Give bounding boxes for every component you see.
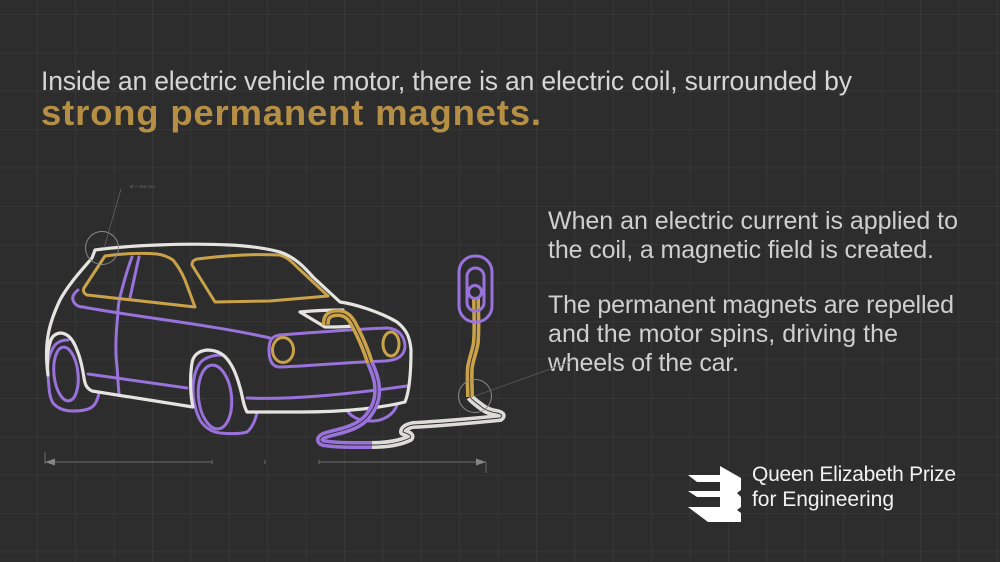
white body outline (46, 244, 411, 412)
left dimension arrow (45, 452, 212, 464)
text block: explanation: wheels of the car. (547, 349, 739, 377)
callout label: Ø × 152 mm (130, 184, 155, 189)
logo: Queen Elizabeth Prize for Engineering (688, 463, 956, 522)
amber windows and lights (83, 253, 399, 362)
cable core line (320, 297, 502, 445)
annotation: cable callout (458, 362, 570, 412)
car illustration (46, 244, 502, 445)
dimension arrows (45, 452, 486, 473)
heading line 1: Inside an electric vehicle motor, there is an electric coil, surrounded by (41, 66, 853, 96)
heading (41, 66, 853, 133)
charging cable (320, 297, 502, 445)
logo mark (688, 466, 741, 522)
text block: explanation: When an electric current is applied to (548, 207, 958, 235)
centre tick (264, 460, 266, 464)
right dimension arrow (319, 460, 486, 473)
purple car lines (48, 257, 407, 434)
front wheel (193, 355, 257, 434)
front wheel arch under bumper (348, 405, 397, 421)
heading line 2 highlight: strong permanent magnets. (41, 92, 541, 133)
text block: explanation: the coil, a magnetic field is created. (548, 236, 934, 264)
charge port flap (300, 310, 352, 327)
headlight band (269, 328, 405, 367)
body crease and door lines (73, 290, 270, 338)
charging post (459, 256, 492, 322)
logo wordmark (752, 463, 956, 511)
annotation: roof callout (86, 184, 155, 264)
logo wordmark: Queen Elizabeth Prize (752, 463, 956, 486)
text block: explanation (547, 207, 958, 377)
text block: explanation: The permanent magnets are repelled (548, 291, 954, 319)
rear wheel (48, 340, 99, 411)
text block: explanation: and the motor spins, driving the (548, 320, 898, 348)
logo wordmark: for Engineering (752, 488, 894, 511)
